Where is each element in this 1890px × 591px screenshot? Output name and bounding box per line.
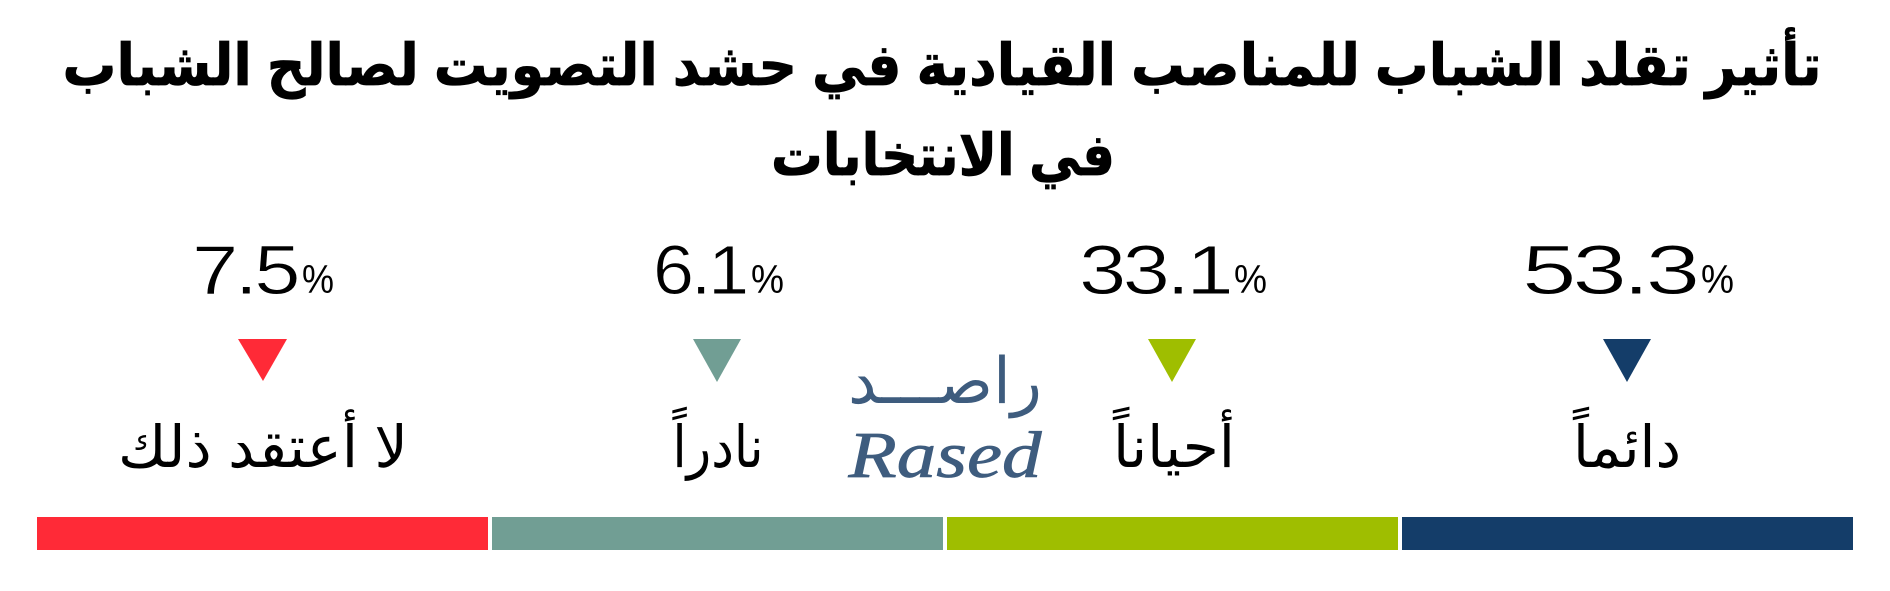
value 33.1%: % bbox=[1234, 258, 1267, 302]
marker triangle red bbox=[238, 339, 287, 381]
bar segment navy bbox=[1402, 517, 1853, 550]
bar segment teal bbox=[492, 517, 943, 550]
logo: Rased: راصـــد bbox=[848, 345, 1042, 419]
marker triangle green bbox=[1148, 339, 1196, 382]
value 53.3% bbox=[1522, 231, 1734, 309]
value 7.5%: % bbox=[302, 258, 334, 302]
column: 6.1% rarely bbox=[653, 231, 784, 481]
bar segment green bbox=[947, 517, 1398, 550]
bar segment red bbox=[37, 517, 488, 550]
value 33.1% bbox=[1079, 231, 1267, 309]
marker triangle navy bbox=[1603, 339, 1651, 382]
label: do not think so: لا أعتقد ذلك bbox=[118, 409, 408, 480]
column: 33.1% sometimes bbox=[1079, 231, 1267, 480]
value 6.1%: 6.1 bbox=[653, 231, 746, 309]
logo: Rased: Rased bbox=[847, 419, 1043, 492]
title: في الانتخابات bbox=[771, 123, 1115, 189]
legend colour bar bbox=[37, 517, 1853, 550]
value 6.1% bbox=[653, 231, 784, 309]
label: sometimes: أحياناً bbox=[1113, 406, 1235, 480]
value 53.3%: % bbox=[1701, 258, 1734, 302]
label: rarely: نادراً bbox=[672, 406, 764, 481]
value 7.5% bbox=[192, 231, 334, 309]
column: 53.3% always bbox=[1522, 231, 1734, 480]
title bbox=[62, 27, 1822, 189]
value 7.5%: 7.5 bbox=[192, 231, 297, 309]
logo: Rased bbox=[847, 345, 1043, 492]
value 53.3%: 53.3 bbox=[1522, 231, 1696, 309]
value 33.1%: 33.1 bbox=[1079, 231, 1230, 309]
column: 7.5% do not think so bbox=[118, 231, 408, 480]
label: always: دائماً bbox=[1573, 406, 1681, 480]
value 6.1%: % bbox=[751, 258, 784, 302]
marker triangle teal bbox=[693, 339, 741, 382]
